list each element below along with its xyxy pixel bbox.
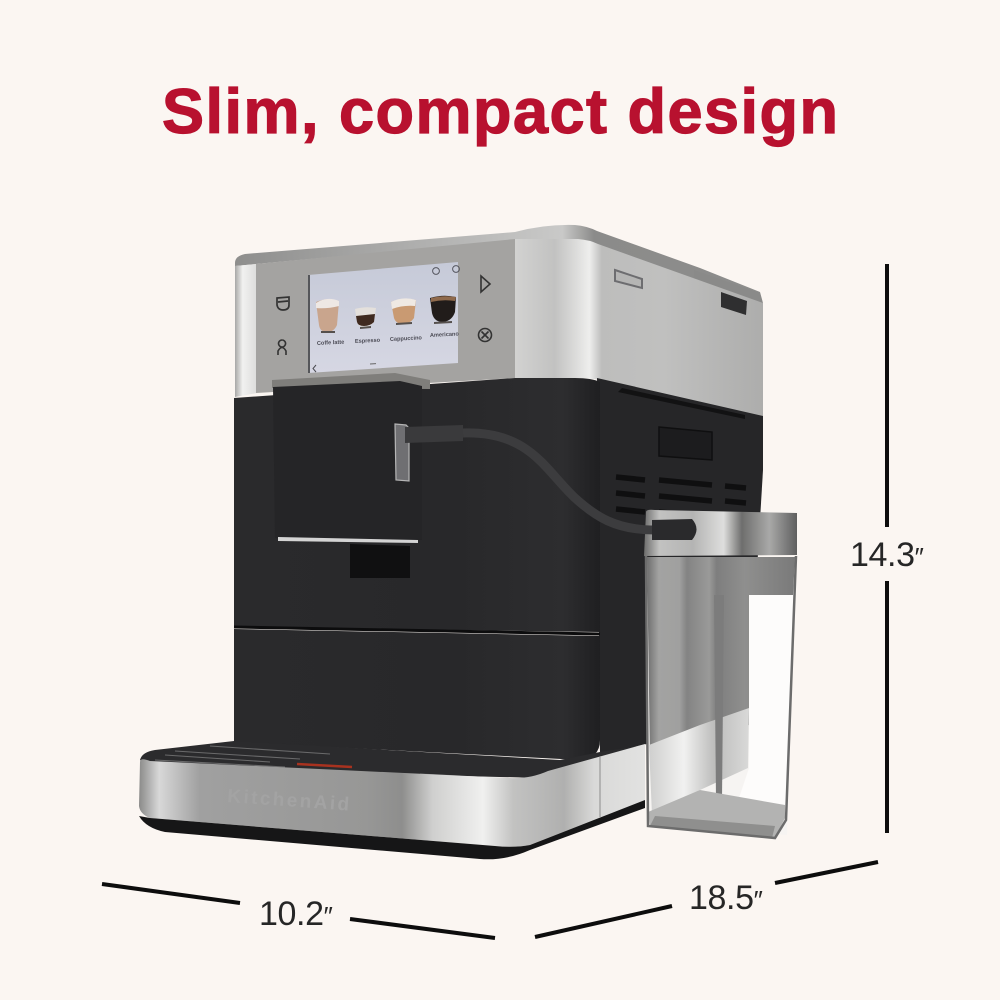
stainless left strip <box>235 264 257 397</box>
back arrow <box>313 365 316 372</box>
jar outline <box>646 556 796 838</box>
black side <box>597 378 763 755</box>
tray steel front <box>139 744 645 847</box>
cup: espresso <box>355 307 376 329</box>
icon: person <box>278 340 286 355</box>
grill lines <box>155 746 460 776</box>
jar base <box>648 790 785 838</box>
side vents <box>616 477 746 519</box>
lid connector <box>652 519 696 540</box>
height line lower <box>885 581 889 833</box>
steam wand <box>395 424 409 481</box>
brand emboss: KitchenAid <box>227 786 350 815</box>
tray top <box>140 741 645 778</box>
height label: 14.3″ <box>850 536 924 574</box>
black base <box>139 800 645 859</box>
stainless seen through glass <box>649 708 749 815</box>
black front drawer <box>234 629 600 760</box>
coffee machine illustration <box>139 225 797 859</box>
icon: play <box>481 276 490 292</box>
jar straw <box>714 595 724 800</box>
depth line left <box>535 906 672 937</box>
height line upper <box>885 264 889 527</box>
icon: cancel <box>478 328 492 342</box>
stainless side panel <box>515 239 763 417</box>
side shelf shadow <box>618 388 745 419</box>
title: Slim, compact design <box>162 77 838 147</box>
tray seam <box>599 757 601 817</box>
screen labels <box>317 331 460 347</box>
side window <box>659 427 712 460</box>
machine top edge <box>235 225 763 303</box>
rear lid <box>694 270 763 304</box>
side button <box>615 270 642 288</box>
width line left <box>102 884 240 903</box>
page dots <box>370 363 376 365</box>
depth label: 18.5″ <box>689 879 763 917</box>
cup: caffe latte <box>316 299 339 333</box>
screen labels: Coffe latte <box>317 340 344 347</box>
spout body <box>273 381 422 540</box>
width label: 10.2″ <box>259 895 333 933</box>
spout chrome strip <box>278 537 418 543</box>
icon: cup <box>277 297 289 310</box>
cup: cappuccino <box>391 298 416 325</box>
water tank handle <box>721 292 747 315</box>
screen labels: Americano <box>430 331 460 339</box>
milk tube connector <box>405 425 463 443</box>
jar back tint <box>646 557 796 835</box>
jar lid <box>644 510 797 556</box>
milk jar <box>463 433 797 838</box>
screen labels: Cappuccino <box>390 335 423 343</box>
black front upper <box>234 378 600 632</box>
screen labels: Espresso <box>355 338 381 345</box>
spout cap <box>272 373 430 389</box>
milk tube <box>463 433 655 530</box>
red indicator <box>297 764 352 767</box>
grey control panel <box>256 239 515 393</box>
jar white reflection <box>735 595 793 810</box>
depth dimension <box>535 862 878 937</box>
milk tank through glass <box>647 557 795 760</box>
drawer seam <box>234 627 600 634</box>
width dimension <box>102 884 495 938</box>
coffee outlet <box>350 544 410 578</box>
touch screen <box>308 262 460 373</box>
depth line right <box>775 862 878 883</box>
screen top icons <box>433 266 459 274</box>
cup: americano <box>430 296 456 324</box>
width line right <box>350 919 495 938</box>
